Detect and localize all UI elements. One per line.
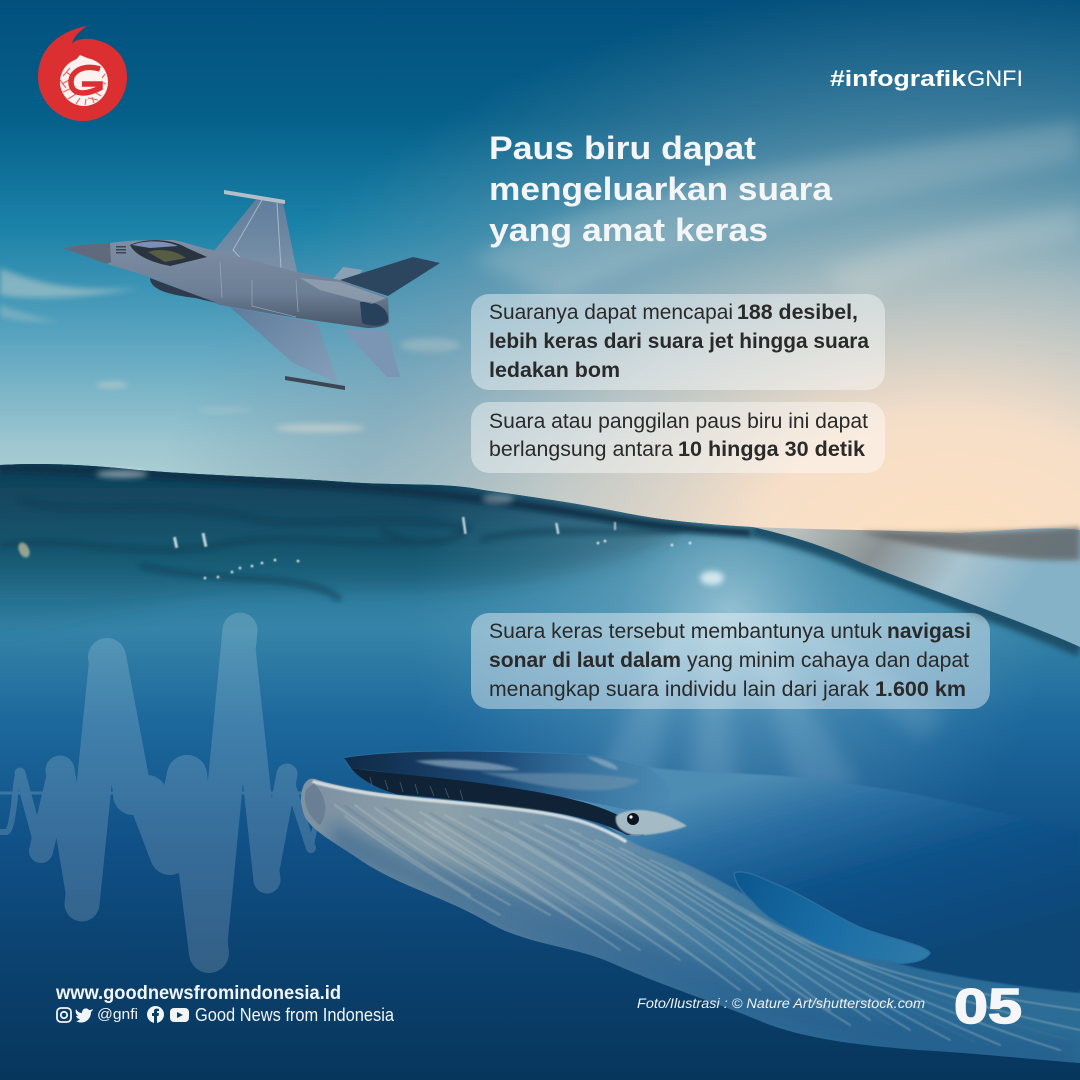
whale upper body xyxy=(344,752,1080,993)
panel: sonar navigation fact: sonar di laut dalam xyxy=(489,649,681,672)
jet upper wing missile xyxy=(224,190,285,204)
panel: sonar navigation fact: menangkap suara individu lain dari jarak xyxy=(489,678,870,701)
jet lower wing xyxy=(230,307,338,383)
photo credit: Foto/Ilustrasi : © Nature Art/shutterstock.com xyxy=(637,996,925,1011)
whale belly shadow xyxy=(330,820,1080,1075)
throat pleats xyxy=(335,805,1080,1050)
whale lower lip xyxy=(314,782,625,841)
whale eye xyxy=(616,810,687,835)
jet lower tail xyxy=(343,330,400,377)
whale illustration xyxy=(301,752,1080,1075)
footer: website and social handles xyxy=(55,983,395,1025)
icon: facebook xyxy=(147,1006,164,1023)
panel: call duration fact: Suara atau panggilan paus biru ini dapat xyxy=(489,410,868,433)
jet upper wing xyxy=(213,198,297,272)
whale baleen and mouth xyxy=(351,768,644,836)
panel: sonar navigation fact: yang minim cahaya dan dapat xyxy=(687,649,969,672)
title: yang amat keras xyxy=(489,212,768,248)
jet dark tail fin xyxy=(340,257,440,296)
panel: call duration fact xyxy=(471,402,885,473)
logo xyxy=(38,26,127,121)
footer: website and social handles: @gnfi xyxy=(97,1006,138,1023)
whale belly xyxy=(301,779,1080,1063)
title: mengeluarkan suara xyxy=(489,171,832,207)
panel: sonar navigation fact: Suara keras tersebut membantunya untuk xyxy=(489,620,882,643)
footer: website and social handles: Good News from Indonesia xyxy=(195,1005,395,1025)
whale flipper xyxy=(734,872,930,963)
title xyxy=(489,130,832,248)
page number: 05 xyxy=(954,980,1022,1034)
panel: call duration fact: berlangsung antara xyxy=(489,438,673,461)
panel: sonar navigation fact xyxy=(471,613,990,709)
hashtag: GNFI xyxy=(967,66,1023,91)
hashtag: #infografik xyxy=(830,66,967,91)
panel: call duration fact: 10 hingga 30 detik xyxy=(678,438,865,461)
jet rear small fin xyxy=(333,267,363,284)
panel: decibel fact: 188 desibel, xyxy=(737,301,858,324)
upper jaw highlights xyxy=(415,756,640,790)
panel: decibel fact: lebih keras dari suara jet hingga suara xyxy=(489,330,869,353)
panel: decibel fact: Suaranya dapat mencapai xyxy=(489,301,733,324)
waveform graphic xyxy=(0,630,320,953)
jet fuselage xyxy=(62,240,389,328)
background: sky with clouds xyxy=(0,0,1080,540)
jet cockpit canopy xyxy=(130,240,207,266)
footer: website and social handles: www.goodnewsfromindonesia.id xyxy=(55,983,341,1004)
title: Paus biru dapat xyxy=(489,130,756,166)
icon: youtube xyxy=(170,1008,189,1022)
icon: instagram xyxy=(57,1008,71,1022)
fighter jet xyxy=(62,190,440,390)
panel: decibel fact: ledakan bom xyxy=(489,359,620,382)
icon: twitter xyxy=(76,1008,93,1023)
panel: decibel fact xyxy=(471,294,885,390)
panel: sonar navigation fact: navigasi xyxy=(887,620,971,643)
background: sea with surface and light xyxy=(0,440,1080,1080)
panel: sonar navigation fact: 1.600 km xyxy=(875,678,966,701)
jet lower wing missile xyxy=(285,376,345,390)
